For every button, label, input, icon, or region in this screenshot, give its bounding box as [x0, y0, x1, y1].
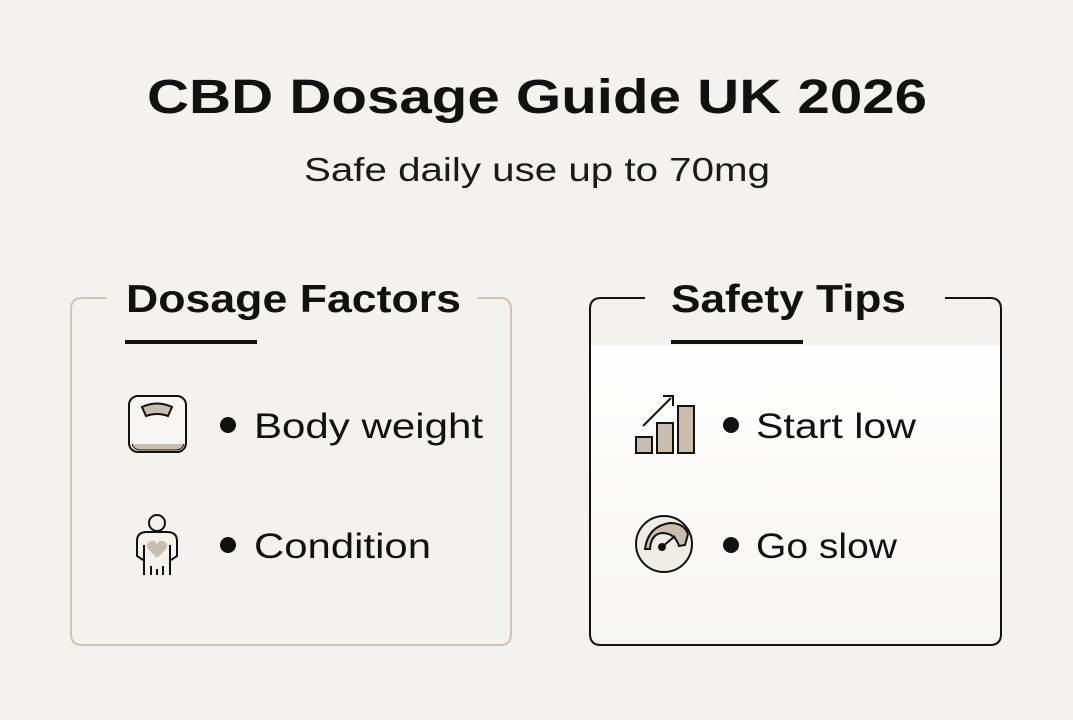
bullet: body weight: Body weight	[254, 407, 483, 446]
icon: bar chart	[636, 396, 694, 453]
bullet: start low: Start low	[756, 407, 917, 446]
icon: scale	[129, 396, 186, 452]
icon: body with heart	[137, 515, 177, 575]
subtitle: Safe daily use up to 70mg	[304, 151, 770, 188]
bullet: go slow: Go slow	[756, 527, 898, 566]
heading: dosage factors: Dosage Factors	[126, 278, 461, 321]
heading: safety tips: Safety Tips	[671, 278, 906, 321]
panel: safety tips	[590, 278, 1001, 645]
title: CBD Dosage Guide UK 2026	[147, 71, 927, 124]
icon: gauge	[636, 516, 692, 572]
bullet: condition: Condition	[254, 527, 431, 566]
panel: dosage factors	[71, 278, 511, 645]
